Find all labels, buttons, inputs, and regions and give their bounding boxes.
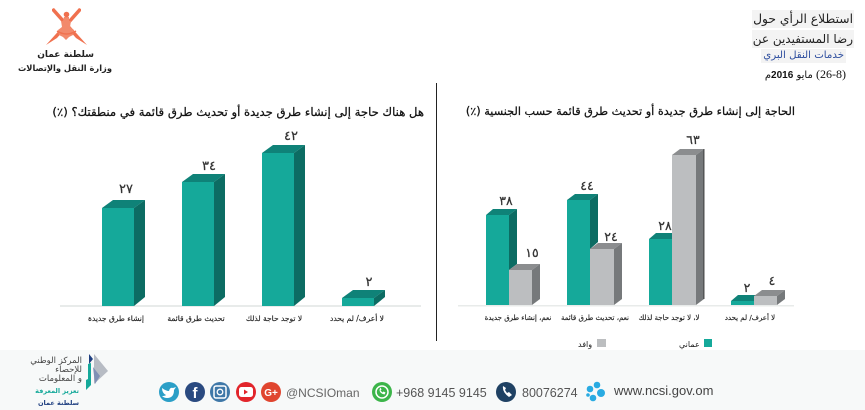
bar: new road 27 [102, 182, 145, 306]
group: new road [486, 193, 540, 305]
bar: no need 42 [262, 129, 305, 306]
toll free number: 80076274 [522, 386, 578, 400]
axis labels: إنشاء طرق جديدة [88, 314, 144, 323]
NCSI logo text: تعزيز المعرفة [35, 387, 79, 395]
group: no need: ٢٨ [658, 218, 672, 233]
axis labels: نعم، إنشاء طرق جديدة [485, 314, 551, 322]
NCSI logo text: للإحصاء [55, 365, 82, 375]
icon: facebook [185, 382, 205, 402]
header: survey title block [752, 10, 854, 81]
group: no need: ٦٣ [686, 132, 700, 147]
divider between charts [436, 83, 437, 341]
heading: right chart title: الحاجة إلى إنشاء طرق جديدة أو تحديث طرق قائمة حسب الجنسية (٪) [466, 105, 795, 118]
icon: twitter [159, 382, 179, 402]
icon: google plus [261, 382, 281, 402]
NCSI logo text [30, 356, 82, 407]
axis labels [88, 313, 384, 323]
group: don't know: ٢ [744, 280, 751, 295]
icon: khanjar emblem [46, 8, 87, 45]
title line 1: استطلاع الرأي حول [753, 12, 853, 26]
bar: no need 42: ٤٢ [284, 129, 298, 144]
title line 2: رضا المستفيدين عن [753, 32, 853, 46]
axis labels: تحديث طرق قائمة [167, 314, 225, 323]
header: ministry logo [18, 8, 112, 73]
icon: globe [586, 382, 605, 401]
icon: phone [496, 382, 516, 402]
axis labels: لا، لا توجد حاجة لذلك [638, 314, 700, 322]
axis labels: نعم، تحديث طرق قائمة [561, 314, 629, 322]
group: new road: ١٥ [525, 245, 539, 260]
NCSI logo text: و المعلومات [39, 374, 82, 384]
bar: new road 27: ٢٧ [119, 182, 133, 197]
group: upgrade road [567, 178, 622, 305]
axis labels [485, 313, 775, 322]
footer band [0, 350, 865, 410]
NCSI logo text: المركز الوطني [30, 356, 82, 366]
bar: don't know 2 [342, 275, 385, 306]
group: upgrade road: ٤٤ [580, 178, 594, 193]
icon: google plus: G+ [264, 388, 278, 399]
axis labels: لا أعرف/ لم يحدد [330, 313, 384, 323]
icon: facebook: f [192, 385, 198, 402]
heading: left chart title: هل هناك حاجة إلى إنشاء طرق جديدة أو تحديث طرق قائمة في منطقتك؟ (٪) [52, 105, 424, 119]
group: upgrade road: ٢٤ [604, 229, 618, 244]
bar: don't know 2: ٢ [366, 275, 373, 290]
icon: whatsapp [372, 382, 392, 402]
logo text: ministry: وزارة النقل والإتصالات [18, 63, 112, 73]
group: don't know: ٤ [769, 273, 775, 288]
axis labels: لا توجد حاجة لذلك [246, 314, 302, 323]
bar: upgrade road 34 [182, 159, 225, 306]
legend: omani: عماني [679, 340, 700, 349]
logo text: sultanate: سلطنة عمان [37, 50, 94, 60]
bar: upgrade road 34: ٣٤ [202, 159, 216, 174]
legend: expatriate: وافد [578, 340, 592, 349]
subtitle: land transport services: خدمات النقل البري [763, 50, 844, 61]
date: (26-8) مايو 2016م [765, 67, 846, 81]
website: www.ncsi.gov.om [613, 383, 713, 398]
legend: omani [679, 339, 712, 349]
group: no need [649, 132, 704, 305]
icon: youtube [236, 382, 256, 402]
legend: expatriate [578, 339, 606, 349]
handle: @NCSIOman [286, 386, 360, 400]
group: don't know [731, 273, 785, 305]
group: new road: ٣٨ [499, 193, 513, 208]
icon: instagram [210, 382, 230, 402]
NCSI logo text: سلطنة عمان [38, 399, 79, 407]
phone number: +968 9145 9145 [396, 386, 487, 400]
axis labels: لا أعرف/ لم يحدد [725, 313, 775, 322]
NCSI logo mark [86, 354, 108, 390]
